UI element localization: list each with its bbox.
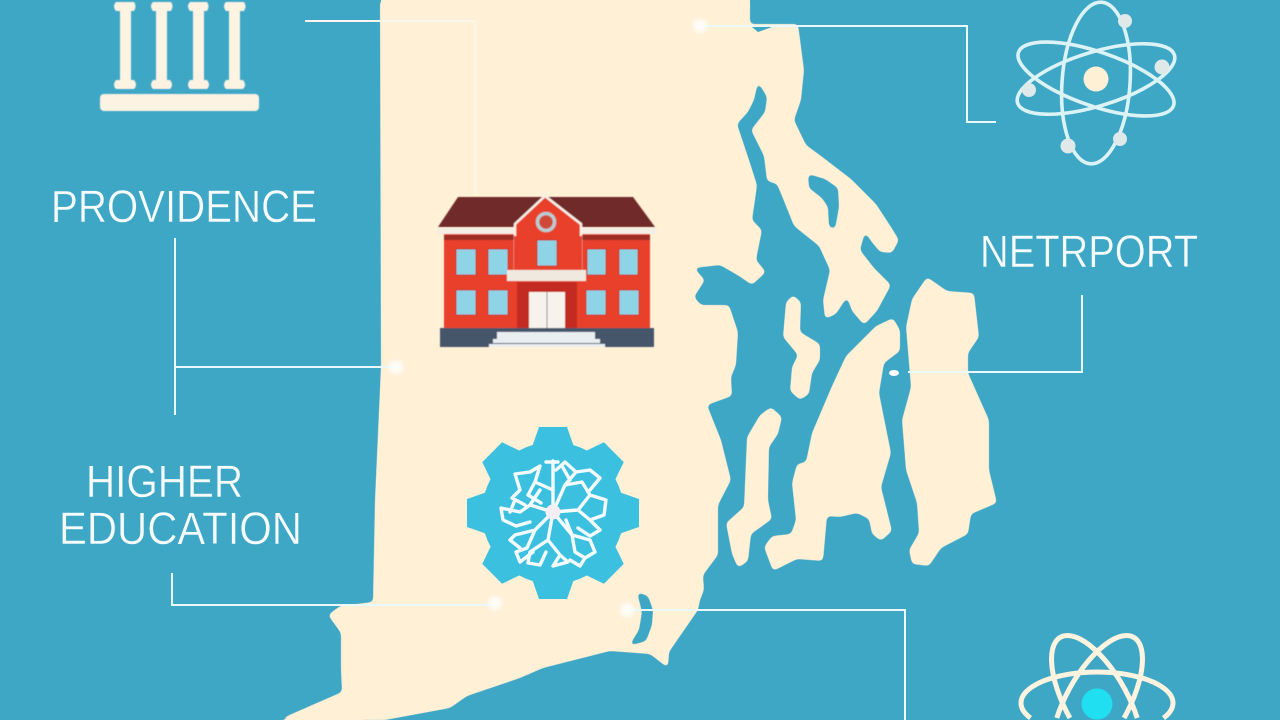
connector: top atom: [700, 26, 996, 122]
column 2: [151, 2, 172, 89]
portico: [507, 270, 586, 281]
bay notch at top of coast: [752, 27, 772, 32]
door: [529, 292, 565, 332]
connector: Providence label to map: [175, 238, 395, 415]
steps: [489, 332, 605, 347]
nucleus: [1084, 66, 1108, 92]
building body: [444, 232, 650, 329]
label: Netrport: NETRPORT: [980, 226, 1198, 277]
entrance recess: [517, 282, 577, 330]
small dot in bay: [889, 370, 899, 376]
network hub: [546, 504, 560, 520]
gear body: [467, 427, 639, 599]
island: Conanicut: [764, 318, 900, 571]
map of Rhode Island: [278, 0, 997, 720]
icon: columns: [100, 2, 259, 111]
electrons: [1022, 14, 1170, 154]
label line: Education: EDUCATION: [59, 503, 302, 554]
map top edge fill: [381, 0, 750, 8]
island: Hope: [726, 407, 782, 568]
mainland: [278, 0, 899, 720]
island: Aquidneck: [902, 277, 997, 566]
icon: atom bottom right: [1021, 635, 1173, 720]
icon: gear with network: [467, 427, 639, 599]
label: Higher Education: [59, 456, 302, 554]
base plate: [100, 94, 259, 111]
round window: [538, 214, 554, 230]
connector: bottom atom: [627, 610, 905, 720]
column 1: [114, 2, 136, 89]
connector: Providence columns to school: [305, 21, 475, 195]
map shapes: [278, 0, 997, 720]
connector: Higher Education label to gear: [172, 573, 495, 605]
icon: red school building: [437, 196, 657, 347]
icon: atom top right: [1010, 0, 1182, 166]
column 4: [224, 2, 246, 89]
label: Providence: PROVIDENCE: [51, 181, 317, 232]
roof: [438, 197, 655, 227]
label line: Higher: HIGHER: [86, 456, 243, 507]
central gable: [515, 196, 581, 270]
nucleus: [1082, 688, 1112, 720]
island: Prudence: [783, 295, 820, 400]
orbits: [1010, 0, 1182, 166]
windows: [456, 240, 639, 315]
eaves shadow: [444, 235, 650, 240]
connector end dots: [389, 19, 899, 617]
orbits: [1021, 635, 1173, 718]
glow dots: [389, 19, 707, 617]
column 3: [188, 2, 209, 89]
map bottom edge fill: [283, 708, 420, 720]
connector: Newport label: [908, 295, 1082, 372]
connector lines: [172, 21, 1082, 720]
network pattern: [501, 461, 606, 566]
eaves: [437, 228, 657, 234]
base: [440, 328, 654, 347]
